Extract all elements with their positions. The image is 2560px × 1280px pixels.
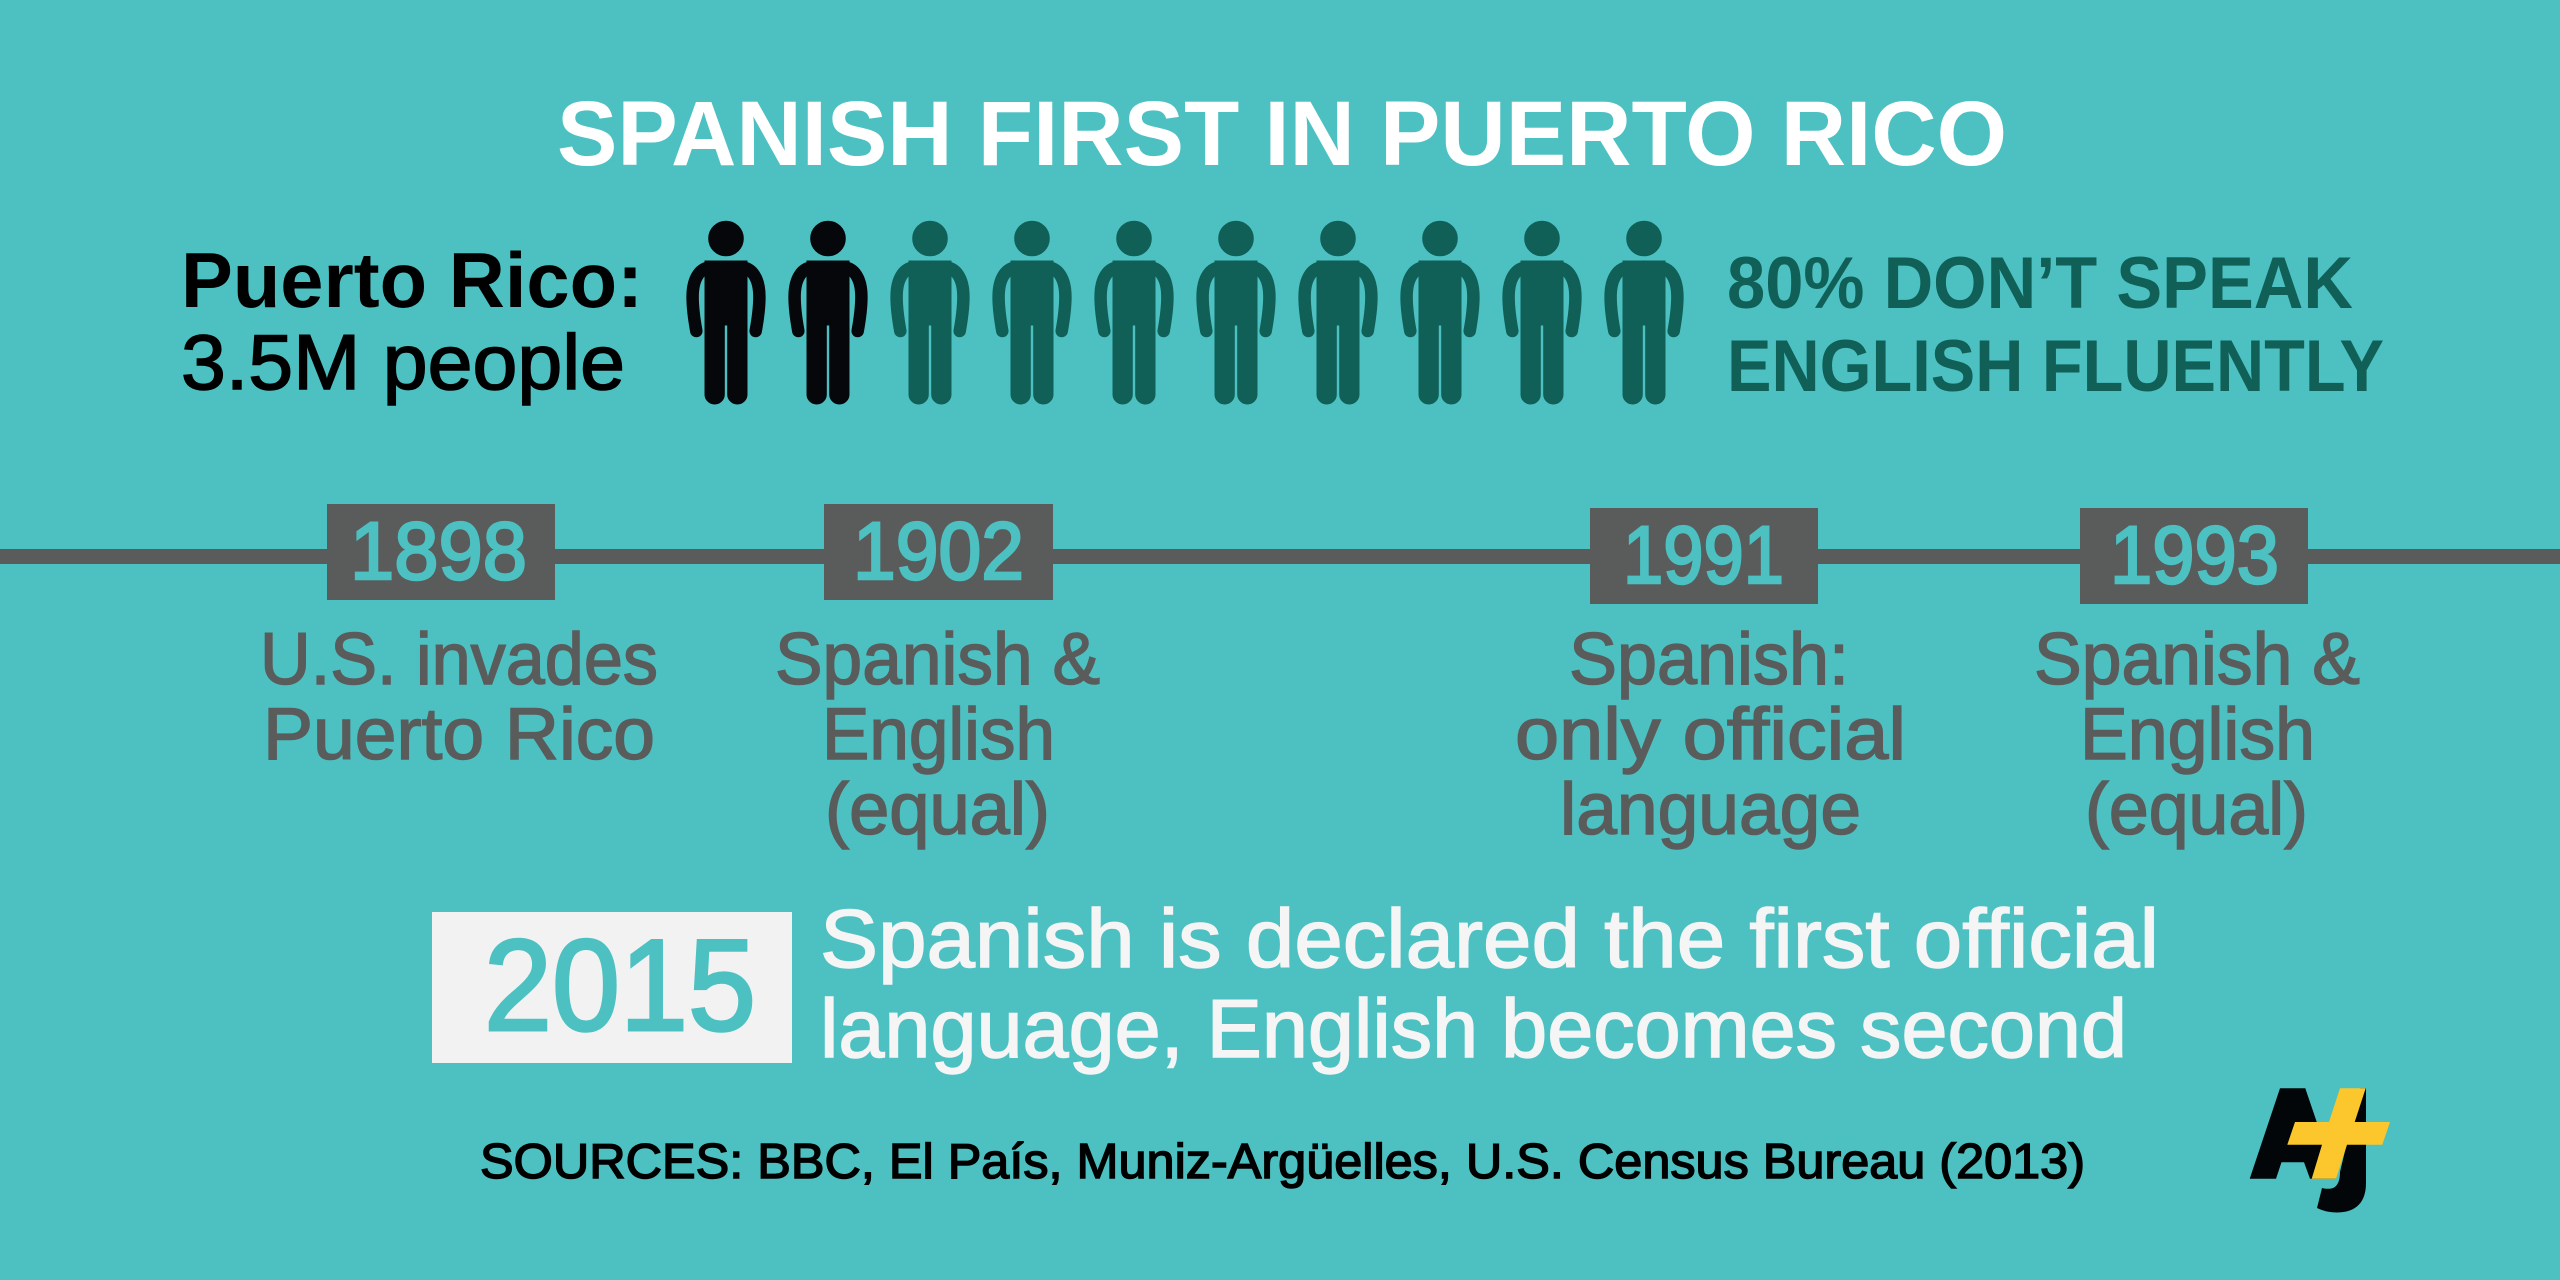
title: SPANISH FIRST IN PUERTO RICO <box>557 83 2007 185</box>
timeline event: 1993: (equal) <box>2085 769 2308 850</box>
sources: SOURCES: BBC, El País, Muniz-Argüelles, U.S. Census Bureau (2013) <box>480 1135 2085 1189</box>
callout: 80 percent <box>1727 243 2384 407</box>
timeline event: 1993: 1993 <box>2110 510 2279 601</box>
2015 statement <box>820 892 2159 1075</box>
2015 statement: language, English becomes second <box>820 982 2127 1075</box>
timeline event: 1993 <box>2034 508 2360 850</box>
timeline event: 1993: English <box>2080 694 2315 775</box>
timeline event: 1898: Puerto Rico <box>263 694 655 775</box>
timeline event: 1902: 1902 <box>853 506 1024 597</box>
timeline event: 1902 <box>775 504 1100 850</box>
timeline event: 1898 <box>260 504 658 775</box>
icon: AJ+ logo <box>2250 1088 2390 1212</box>
population label: Puerto Rico: <box>181 236 643 324</box>
timeline event: 1898: 1898 <box>350 506 527 597</box>
population label <box>181 236 643 406</box>
callout: 80 percent: 80% DON’T SPEAK <box>1727 243 2353 324</box>
timeline event: 1902: Spanish & <box>775 619 1100 700</box>
timeline line <box>0 549 2560 564</box>
pictogram: ten people, two black and eight green <box>693 221 1677 404</box>
timeline event: 1902: English <box>822 694 1055 775</box>
timeline event: 1991: only official <box>1515 694 1906 775</box>
timeline event: 1991 <box>1515 508 1906 850</box>
timeline event: 1991: 1991 <box>1623 510 1784 601</box>
2015 statement: Spanish is declared the first official <box>820 892 2159 985</box>
timeline event: 1993: Spanish & <box>2034 619 2360 700</box>
timeline event: 1898: U.S. invades <box>260 619 658 700</box>
timeline event: 1991: language <box>1560 769 1861 850</box>
population label: 3.5M people <box>181 318 625 406</box>
callout: 80 percent: ENGLISH FLUENTLY <box>1727 326 2384 407</box>
timeline event: 1902: (equal) <box>825 769 1050 850</box>
timeline event: 1991: Spanish: <box>1569 619 1849 700</box>
2015 year box: 2015 <box>484 912 756 1058</box>
